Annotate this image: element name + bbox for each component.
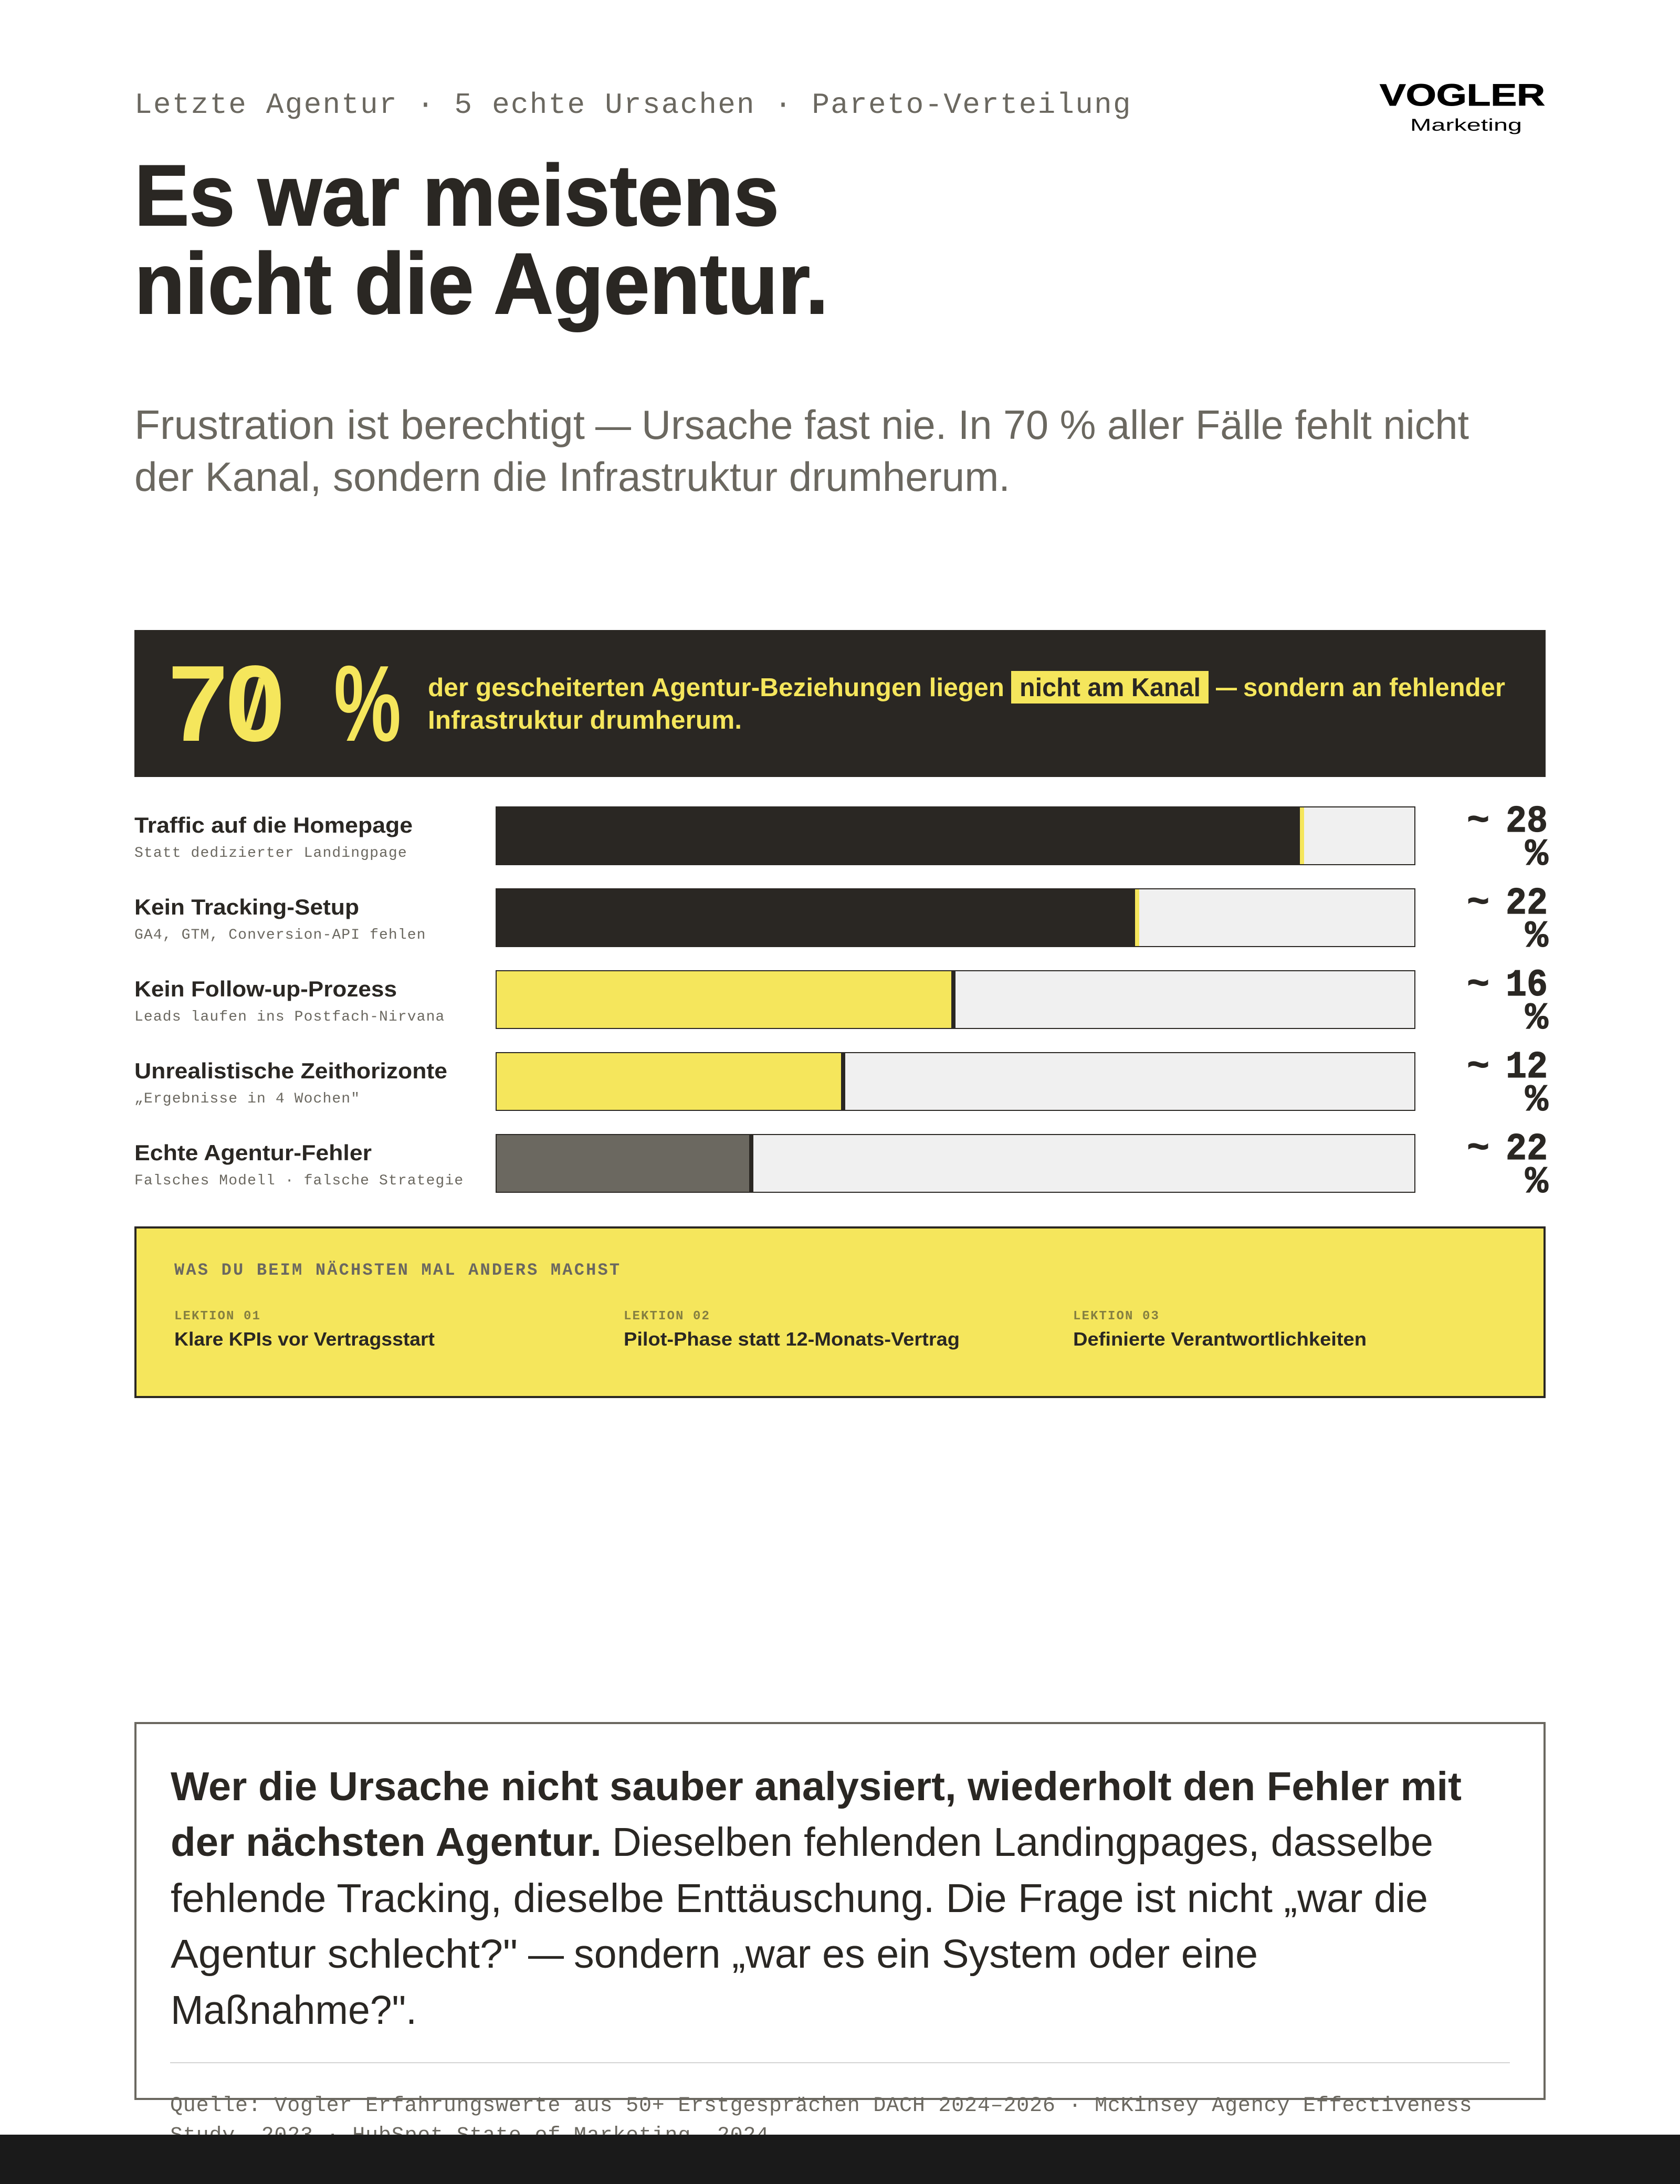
closing text: fehlende Tracking, dieselbe Enttäuschung. Die Frage ist nicht „war die	[171, 1876, 1428, 1921]
row: Kein Follow-up-Prozess: 16	[1506, 964, 1548, 1007]
banner statement: Infrastruktur drumherum.	[428, 706, 742, 734]
lesson 03: Definierte Verantwortlichkeiten	[1073, 1328, 1367, 1350]
subtitle: —	[595, 402, 631, 448]
callout heading: WAS DU BEIM NÄCHSTEN MAL ANDERS MACHST	[174, 1261, 621, 1280]
subtitle: Frustration ist berechtigt	[134, 402, 585, 448]
row: Unrealistische Zeithorizonte: Unrealistische Zeithorizonte	[134, 1058, 447, 1083]
closing text: sondern „war es ein System oder eine	[574, 1931, 1258, 1977]
row: Kein Follow-up-Prozess: ~	[1467, 964, 1489, 1007]
row: Kein Tracking-Setup: Kein Tracking-Setup	[134, 895, 359, 919]
title: Es war meistens	[134, 147, 779, 244]
closing text: Dieselben fehlenden Landingpages, dasselbe	[612, 1820, 1433, 1865]
title	[134, 147, 828, 332]
logo: Vogler Marketing	[1380, 78, 1545, 134]
row: Echte Agentur-Fehler: Falsches Modell · falsche Strategie	[134, 1173, 464, 1189]
banner statement: der gescheiterten Agentur-Beziehungen liegen	[428, 674, 1004, 702]
row: Unrealistische Zeithorizonte: ~	[1467, 1046, 1489, 1089]
banner statement: nicht am Kanal	[1020, 674, 1201, 702]
row: Unrealistische Zeithorizonte: %	[1525, 1079, 1549, 1122]
row: Kein Tracking-Setup	[134, 882, 1549, 958]
panel: 70 % banner	[134, 630, 1546, 777]
row: Traffic auf die Homepage: %	[1525, 833, 1549, 876]
closing text: Maßnahme?".	[171, 1988, 417, 2033]
closing text: Agentur schlecht?"	[171, 1931, 518, 1977]
lesson 02: LEKTION 02	[624, 1309, 710, 1324]
lesson 01	[174, 1309, 435, 1350]
row: Traffic auf die Homepage	[134, 800, 1549, 876]
bottom bar	[0, 2135, 1680, 2184]
source footnote: Study, 2023 · HubSpot State of Marketing, 2024	[170, 2124, 769, 2148]
logo: Vogler Marketing: Marketing	[1410, 116, 1522, 134]
row: Echte Agentur-Fehler: ~	[1467, 1128, 1489, 1171]
lesson 02: Pilot-Phase statt 12-Monats-Vertrag	[624, 1328, 960, 1350]
row: Kein Tracking-Setup: 22	[1506, 882, 1548, 925]
banner statement	[428, 671, 1505, 734]
row: Unrealistische Zeithorizonte: „Ergebnisse in 4 Wochen"	[134, 1091, 360, 1107]
lesson 03: LEKTION 03	[1073, 1309, 1160, 1324]
logo: Vogler Marketing: VOGLER	[1380, 78, 1545, 112]
row: Kein Tracking-Setup: %	[1525, 915, 1549, 958]
row: Kein Follow-up-Prozess: Kein Follow-up-Prozess	[134, 976, 397, 1001]
closing text: —	[528, 1931, 564, 1977]
row: Echte Agentur-Fehler: %	[1525, 1161, 1549, 1204]
row: Echte Agentur-Fehler: 22	[1506, 1128, 1548, 1171]
panel: lessons callout	[135, 1227, 1545, 1397]
lesson 02	[624, 1309, 960, 1350]
banner statement: —	[1216, 674, 1237, 702]
row: Kein Follow-up-Prozess: Leads laufen ins Postfach-Nirvana	[134, 1009, 445, 1025]
big number 70 %: %	[334, 643, 401, 764]
title: nicht die Agentur.	[134, 235, 828, 332]
closing text	[171, 1764, 1462, 2033]
row: Echte Agentur-Fehler	[134, 1128, 1549, 1204]
subtitle: Ursache fast nie. In 70 % aller Fälle fehlt nicht	[642, 402, 1469, 448]
big number 70 %: 70	[168, 643, 282, 764]
big number 70 %	[168, 643, 401, 764]
row: Kein Tracking-Setup: ~	[1467, 882, 1489, 925]
row: Traffic auf die Homepage: Traffic auf die Homepage	[134, 813, 413, 837]
lesson 01: LEKTION 01	[174, 1309, 261, 1324]
subtitle: der Kanal, sondern die Infrastruktur drumherum.	[134, 454, 1010, 500]
row: Kein Follow-up-Prozess	[134, 964, 1549, 1040]
source footnote	[170, 2094, 1472, 2148]
row: Traffic auf die Homepage: ~	[1467, 800, 1489, 843]
row: Traffic auf die Homepage: Statt dedizierter Landingpage	[134, 845, 407, 862]
row: Kein Follow-up-Prozess: %	[1525, 997, 1549, 1040]
row: Kein Tracking-Setup: GA4, GTM, Conversion-API fehlen	[134, 927, 426, 943]
lesson 03	[1073, 1309, 1367, 1350]
lesson 01: Klare KPIs vor Vertragsstart	[174, 1328, 435, 1350]
banner statement: sondern an fehlender	[1243, 674, 1505, 702]
row: Traffic auf die Homepage: 28	[1506, 800, 1548, 843]
closing text: Wer die Ursache nicht sauber analysiert, wiederholt den Fehler mit	[171, 1764, 1462, 1809]
closing text: der nächsten Agentur.	[171, 1820, 602, 1865]
panel: closing statement	[135, 1723, 1545, 2099]
source footnote: Quelle: Vogler Erfahrungswerte aus 50+ Erstgesprächen DACH 2024–2026 · McKinsey Agency Effectiveness	[170, 2094, 1472, 2118]
row: Unrealistische Zeithorizonte: 12	[1506, 1046, 1548, 1089]
subtitle	[134, 402, 1469, 500]
row: Unrealistische Zeithorizonte	[134, 1046, 1549, 1122]
row: Echte Agentur-Fehler: Echte Agentur-Fehler	[134, 1140, 372, 1165]
eyebrow line: Letzte Agentur · 5 echte Ursachen · Pareto-Verteilung	[134, 88, 1132, 122]
